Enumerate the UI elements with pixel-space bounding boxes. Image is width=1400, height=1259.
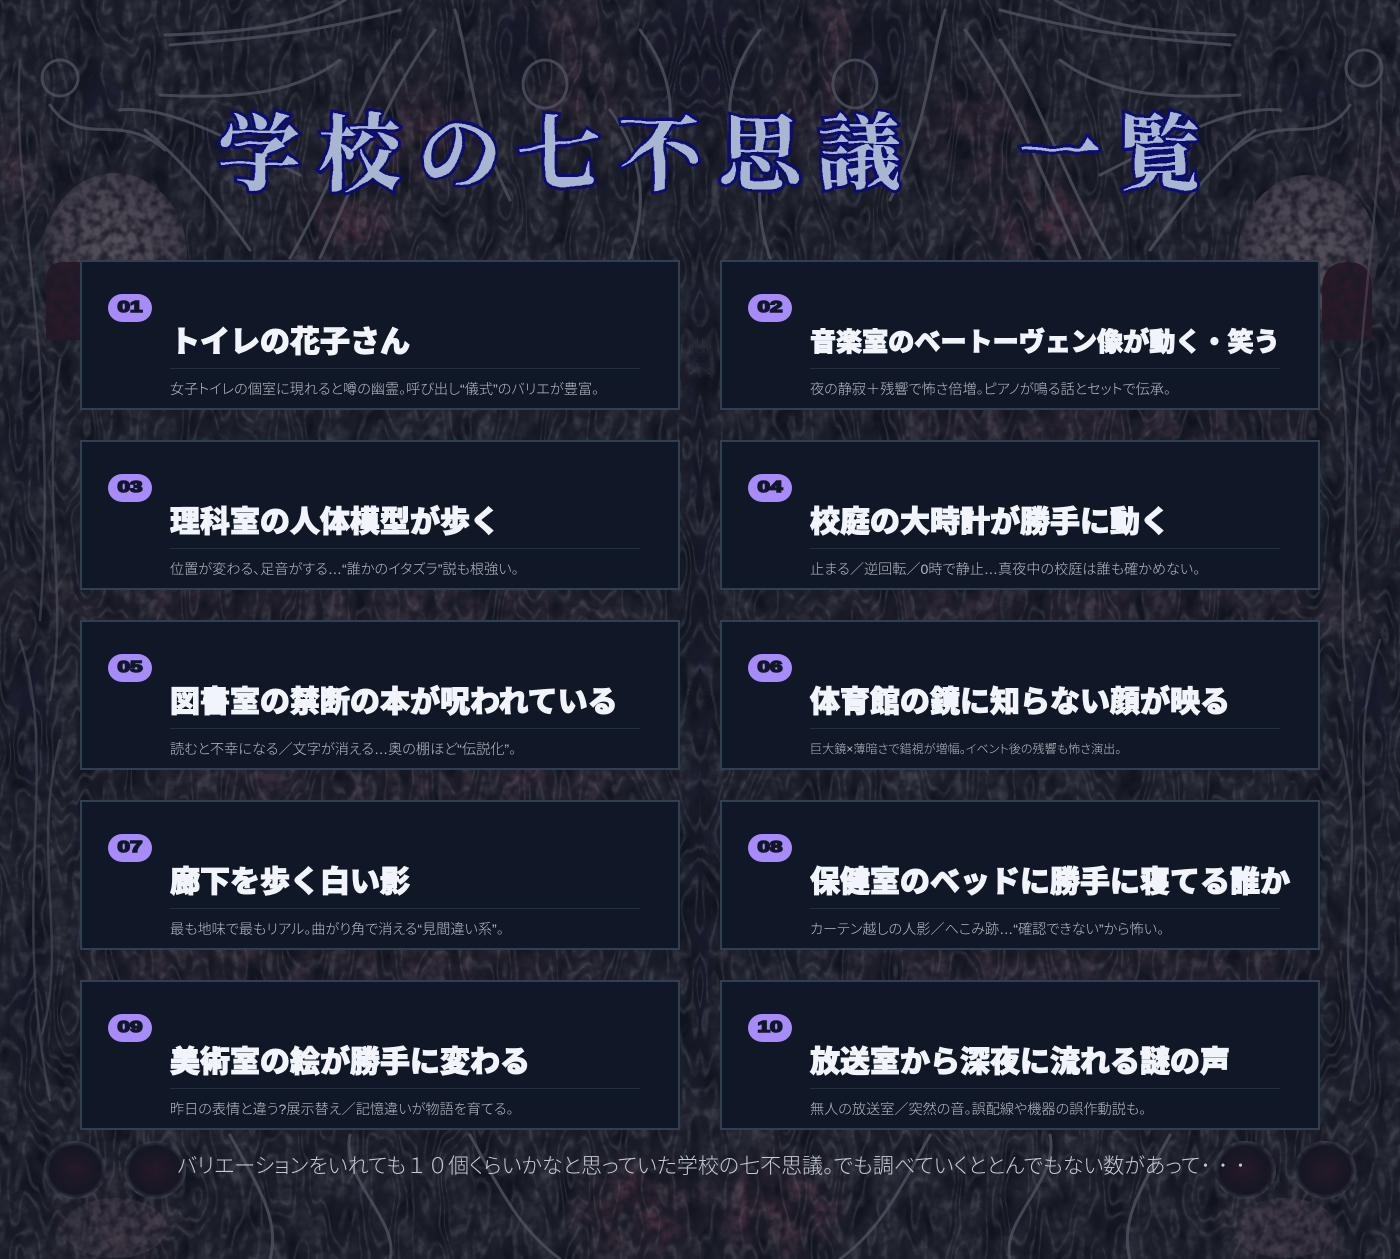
- description 07: 最も地味で最もリアル。曲がり角で消える“見間違い系”。: [170, 921, 504, 937]
- panel: card 02: [720, 260, 1320, 410]
- title: 学校の七不思議 一覧: [218, 87, 1218, 207]
- panel: card 05: [80, 620, 680, 770]
- badge 04: [748, 474, 792, 502]
- description 05: 読むと不幸になる／文字が消える…奥の棚ほど“伝説化”。: [170, 741, 516, 757]
- heading 04: 校庭の大時計が勝手に動く: [810, 506, 1170, 539]
- panel: card 07: [80, 800, 680, 950]
- badge 08: 08: [758, 839, 782, 856]
- badge 05: 05: [118, 659, 142, 676]
- description 06: 巨大鏡×薄暗さで錯視が増幅。イベント後の残響も怖さ演出。: [810, 742, 1121, 756]
- heading 07: 廊下を歩く白い影: [170, 866, 410, 899]
- description 04: 止まる／逆回転／0時で静止…真夜中の校庭は誰も確かめない。: [810, 561, 1200, 577]
- footer note: バリエーションをいれても１０個くらいかなと思っていた学校の七不思議。でも調べていくととんでもない数があって･･･: [177, 1155, 1253, 1178]
- panel: card 08: [720, 800, 1320, 950]
- panel: card 06: [720, 620, 1320, 770]
- badge 02: 02: [758, 299, 782, 316]
- panel: card 09: [80, 980, 680, 1130]
- heading 01: トイレの花子さん: [170, 326, 410, 359]
- description 08: カーテン越しの人影／へこみ跡…“確認できない”から怖い。: [810, 921, 1164, 937]
- description 10: 無人の放送室／突然の音。誤配線や機器の誤作動説も。: [810, 1101, 1146, 1117]
- badge 10: 10: [758, 1019, 782, 1036]
- panel: card 10: [720, 980, 1320, 1130]
- heading 02: 音楽室のベートーヴェン像が動く・笑う: [810, 327, 1280, 357]
- heading 09: 美術室の絵が勝手に変わる: [170, 1046, 530, 1079]
- heading 05: 図書室の禁断の本が呪われている: [170, 686, 618, 719]
- panel: card 04: [720, 440, 1320, 590]
- heading 08: 保健室のベッドに勝手に寝てる誰か: [810, 866, 1290, 899]
- description 02: 夜の静寂＋残響で怖さ倍増。ピアノが鳴る話とセットで伝承。: [810, 381, 1171, 397]
- panel: card 01: [80, 260, 680, 410]
- badge 09: 09: [118, 1019, 142, 1036]
- badge 04: 04: [758, 479, 782, 496]
- badge 07: [108, 834, 152, 862]
- badge 05: [108, 654, 152, 682]
- heading 06: 体育館の鏡に知らない顔が映る: [810, 686, 1230, 719]
- badge 10: [748, 1014, 792, 1042]
- badge 09: [108, 1014, 152, 1042]
- badge 06: [748, 654, 792, 682]
- badge 06: 06: [758, 659, 782, 676]
- description 09: 昨日の表情と違う?展示替え／記憶違いが物語を育てる。: [170, 1101, 514, 1117]
- badge 03: [108, 474, 152, 502]
- badge 01: [108, 294, 152, 322]
- panel: card 03: [80, 440, 680, 590]
- badge 03: 03: [118, 479, 142, 496]
- badge 07: 07: [118, 839, 142, 856]
- badge 01: 01: [118, 299, 142, 316]
- badge 08: [748, 834, 792, 862]
- badge 02: [748, 294, 792, 322]
- description 01: 女子トイレの個室に現れると噂の幽霊。呼び出し“儀式”のバリエが豊富。: [170, 381, 599, 397]
- heading 10: 放送室から深夜に流れる謎の声: [810, 1046, 1230, 1079]
- heading 03: 理科室の人体模型が歩く: [170, 506, 500, 539]
- description 03: 位置が変わる、足音がする…“誰かのイタズラ”説も根強い。: [170, 561, 519, 577]
